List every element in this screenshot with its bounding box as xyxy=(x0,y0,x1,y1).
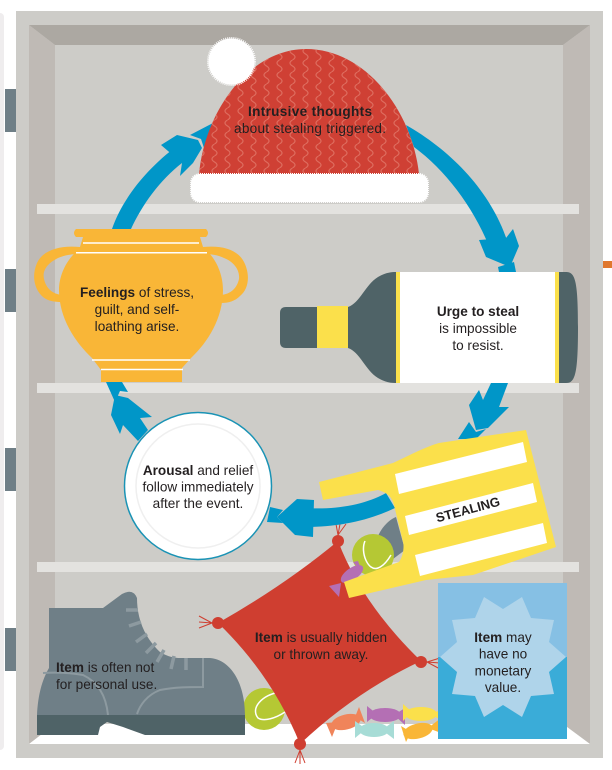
plate text: follow immediately xyxy=(142,480,254,494)
orange tab xyxy=(603,261,612,268)
shopping bag: stealing xyxy=(319,430,556,598)
blue box: no monetary value xyxy=(438,583,567,739)
boot text: for personal use. xyxy=(56,677,157,692)
bottle text: to resist. xyxy=(452,338,504,353)
cushion shape xyxy=(218,541,421,744)
arrow: stealing to arousal xyxy=(267,493,395,537)
bag stripes xyxy=(395,442,547,576)
arrow: thoughts to urge xyxy=(406,125,519,272)
arrow: urge to stealing xyxy=(458,383,509,439)
hat text: Intrusive thoughts xyxy=(248,104,372,119)
arrow: arousal to feelings xyxy=(106,382,152,441)
candy: purple xyxy=(367,706,405,725)
vase text: loathing arise. xyxy=(95,319,179,334)
candy: yellow xyxy=(403,704,441,721)
bottle text: Urge to steal xyxy=(437,304,519,319)
box text: have no xyxy=(479,647,527,662)
plate: arousal xyxy=(124,412,272,560)
cushion text: or thrown away. xyxy=(274,647,368,662)
box text: monetary xyxy=(475,663,532,678)
bottle label xyxy=(396,272,559,383)
starburst xyxy=(440,597,566,717)
cushion tassels xyxy=(199,524,440,764)
hat cuff xyxy=(191,174,428,202)
hat: intrusive thoughts xyxy=(191,38,428,202)
vase text: guilt, and self- xyxy=(95,302,179,317)
candy: gold xyxy=(401,718,441,742)
bottle neck band xyxy=(317,306,348,348)
shelves xyxy=(37,204,579,572)
plate text: after the event. xyxy=(153,496,243,511)
cushion text: Item is usually hidden xyxy=(255,630,387,645)
tennis ball in bag xyxy=(352,534,394,576)
bag contents xyxy=(329,517,405,597)
hat pompom xyxy=(208,38,254,84)
boot text: Item is often not xyxy=(56,660,154,675)
bag shape xyxy=(319,430,556,598)
boot upper xyxy=(37,592,245,715)
candies on floor xyxy=(326,704,441,742)
hat text: about stealing triggered. xyxy=(234,121,386,136)
vase: feelings xyxy=(34,229,248,382)
candy: teal xyxy=(355,721,394,739)
bag text: STEALING xyxy=(434,494,502,525)
plate text: Arousal and relief xyxy=(143,463,253,478)
box text: Item may xyxy=(474,630,532,645)
box text: value. xyxy=(485,680,521,695)
vase stripes xyxy=(76,243,207,370)
cushion knobs xyxy=(212,535,427,750)
candy in bag xyxy=(329,561,366,597)
arrow: feelings to thoughts xyxy=(112,123,216,229)
cushion: hidden item xyxy=(199,524,440,764)
boot sole xyxy=(37,715,245,735)
vase handles xyxy=(34,247,248,303)
boot in bag xyxy=(376,517,405,565)
hat dome xyxy=(199,49,419,174)
page edge strip xyxy=(0,13,4,750)
bottle body xyxy=(280,272,578,383)
bottle: urge to steal xyxy=(280,272,578,383)
candy: orange xyxy=(326,707,365,737)
hat knit pattern xyxy=(199,49,419,174)
vase text: Feelings of stress, xyxy=(80,285,194,300)
vase body xyxy=(59,229,223,382)
bottle text: is impossible xyxy=(439,321,517,336)
boot seams and laces xyxy=(43,610,203,715)
boot xyxy=(37,592,245,735)
side tabs xyxy=(5,89,16,671)
tennis ball on floor xyxy=(243,688,285,730)
